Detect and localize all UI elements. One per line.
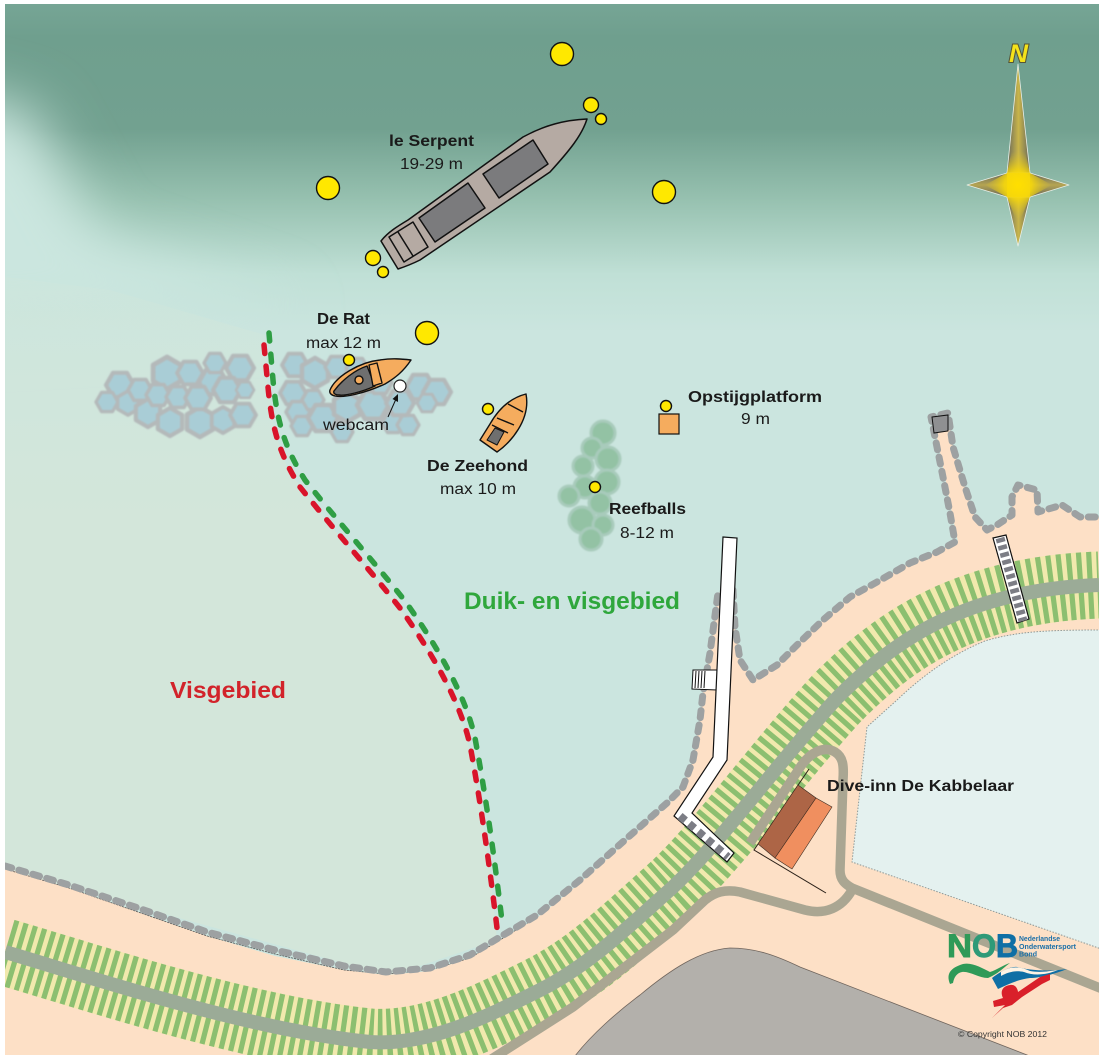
label: Opstijgplatform: Opstijgplatform: [688, 389, 822, 406]
compass rose: [967, 40, 1069, 246]
label: le Serpent: [390, 134, 474, 169]
access roads: [490, 749, 1103, 1058]
compass north letter: N: [1009, 40, 1029, 68]
pier: [674, 537, 737, 862]
label: le Serpent: le Serpent: [389, 133, 475, 150]
webcam marker: [394, 380, 406, 392]
label: De Zeehond: max 10 m: [440, 481, 516, 498]
label: le Serpent: 19-29 m: [400, 156, 463, 173]
label: Reefballs: [610, 502, 686, 538]
label: De Rat: [307, 313, 380, 348]
land with harbour shoreline: [5, 415, 1099, 1055]
boundary line red and green buoys: [264, 333, 502, 928]
reefballs cluster: [559, 421, 620, 550]
wreck: De Rat: [330, 359, 411, 396]
compass star: [967, 64, 1069, 246]
label: De Zeehond: De Zeehond: [427, 458, 528, 475]
logo letters NOB: N: [947, 928, 972, 964]
NOB logo: [947, 928, 1076, 1018]
fishing area zone: [5, 277, 497, 976]
paved parking area: [572, 948, 1040, 1058]
inner lake: [852, 630, 1103, 952]
wreck: le Serpent: [381, 119, 587, 269]
label: De Zeehond: [428, 460, 527, 494]
label: Reefballs: Reefballs: [609, 501, 686, 518]
label: Opstijgplatform: [688, 390, 821, 424]
logo diver: [992, 974, 1050, 1018]
copyright: © Copyright NOB 2012: [958, 1030, 1048, 1039]
logo letters NOB: O: [972, 928, 996, 964]
heading: fishing area: Visgebied: [170, 677, 286, 703]
label: Dive-inn De Kabbelaar: Dive-inn De Kabbelaar: [827, 778, 1014, 795]
label: Reefballs: 8-12 m: [620, 525, 674, 542]
wreck: De Zeehond: [480, 394, 527, 452]
artificial reef hexagons: [96, 353, 451, 442]
building: Dive-inn De Kabbelaar: [754, 769, 832, 893]
webcam arrow: [388, 394, 398, 417]
label: Opstijgplatform: 9 m: [741, 411, 770, 428]
logo waves: [949, 963, 1067, 989]
yellow buoys: [316, 42, 676, 492]
ascent platform: [659, 414, 679, 434]
logo name: [1019, 936, 1076, 956]
logo name: Onderwatersport: [1019, 942, 1076, 951]
logo letters NOB: B: [996, 928, 1018, 964]
label: webcam: webcam: [322, 417, 389, 434]
rock revetment along shore: [5, 413, 1099, 974]
label: De Rat: De Rat: [317, 311, 371, 328]
jetty head block: [932, 415, 948, 433]
logo name: Nederlandse: [1019, 934, 1060, 943]
footbridge over track: [993, 535, 1029, 623]
heading: dive and fishing area: Duik- en visgebied: [464, 588, 680, 615]
logo letters NOB: [948, 934, 1018, 958]
label: De Rat: max 12 m: [306, 335, 381, 352]
green track with sleepers and central path: [5, 585, 1099, 1042]
logo name: Bond: [1019, 950, 1037, 958]
